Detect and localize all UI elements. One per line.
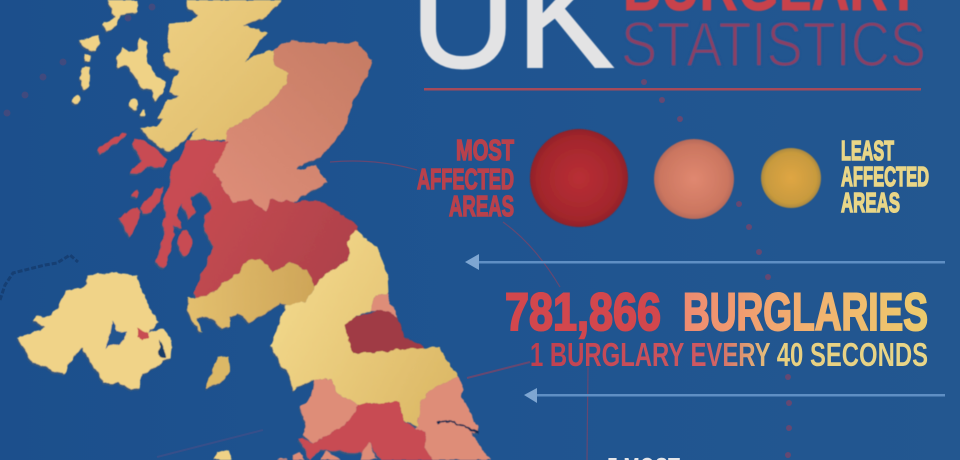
Western Isles and Skye [72,0,167,116]
legend [417,129,929,227]
legend label: most affected: AFFECTED [417,164,514,196]
Belfast [138,328,148,341]
title rule [424,88,921,90]
statistic: total burglaries: 781,866 [505,283,661,342]
Strangford Lough [158,340,165,358]
Inner Hebrides [98,132,192,268]
legend label: most affected [417,135,514,223]
legend label: least affected [841,135,929,218]
region: Durham and Yorkshire, most affected [345,310,425,353]
region: Tyne and Wear [372,293,397,318]
statistic: total burglaries [505,283,928,342]
Lough Neagh [105,320,127,348]
region: northern Scotland [140,0,288,152]
legend circle: most affected [530,129,628,227]
region: north-east Scotland [213,40,372,212]
map of the UK [17,0,490,460]
arrow: lower [524,388,945,403]
legend label: least affected: AREAS [841,187,900,218]
Humber estuary [437,421,480,432]
region: eastern England [415,377,490,460]
region: central and southern Scotland [163,140,358,298]
arrow: upper [465,254,945,270]
region: south-west Scotland [187,258,315,332]
legend label: most affected: MOST [456,135,514,167]
title [410,0,926,99]
legend circle: medium [654,139,734,219]
legend label: most affected: AREAS [449,191,514,223]
region: north-west England [300,378,358,443]
legend label: least affected: LEAST [841,135,894,166]
wales fragments [360,443,377,460]
legend circle: least affected [761,148,821,208]
Isle of Man [205,356,230,388]
region: northern England [270,230,457,427]
Northern Ireland [17,272,172,390]
region: English midlands [298,402,432,460]
